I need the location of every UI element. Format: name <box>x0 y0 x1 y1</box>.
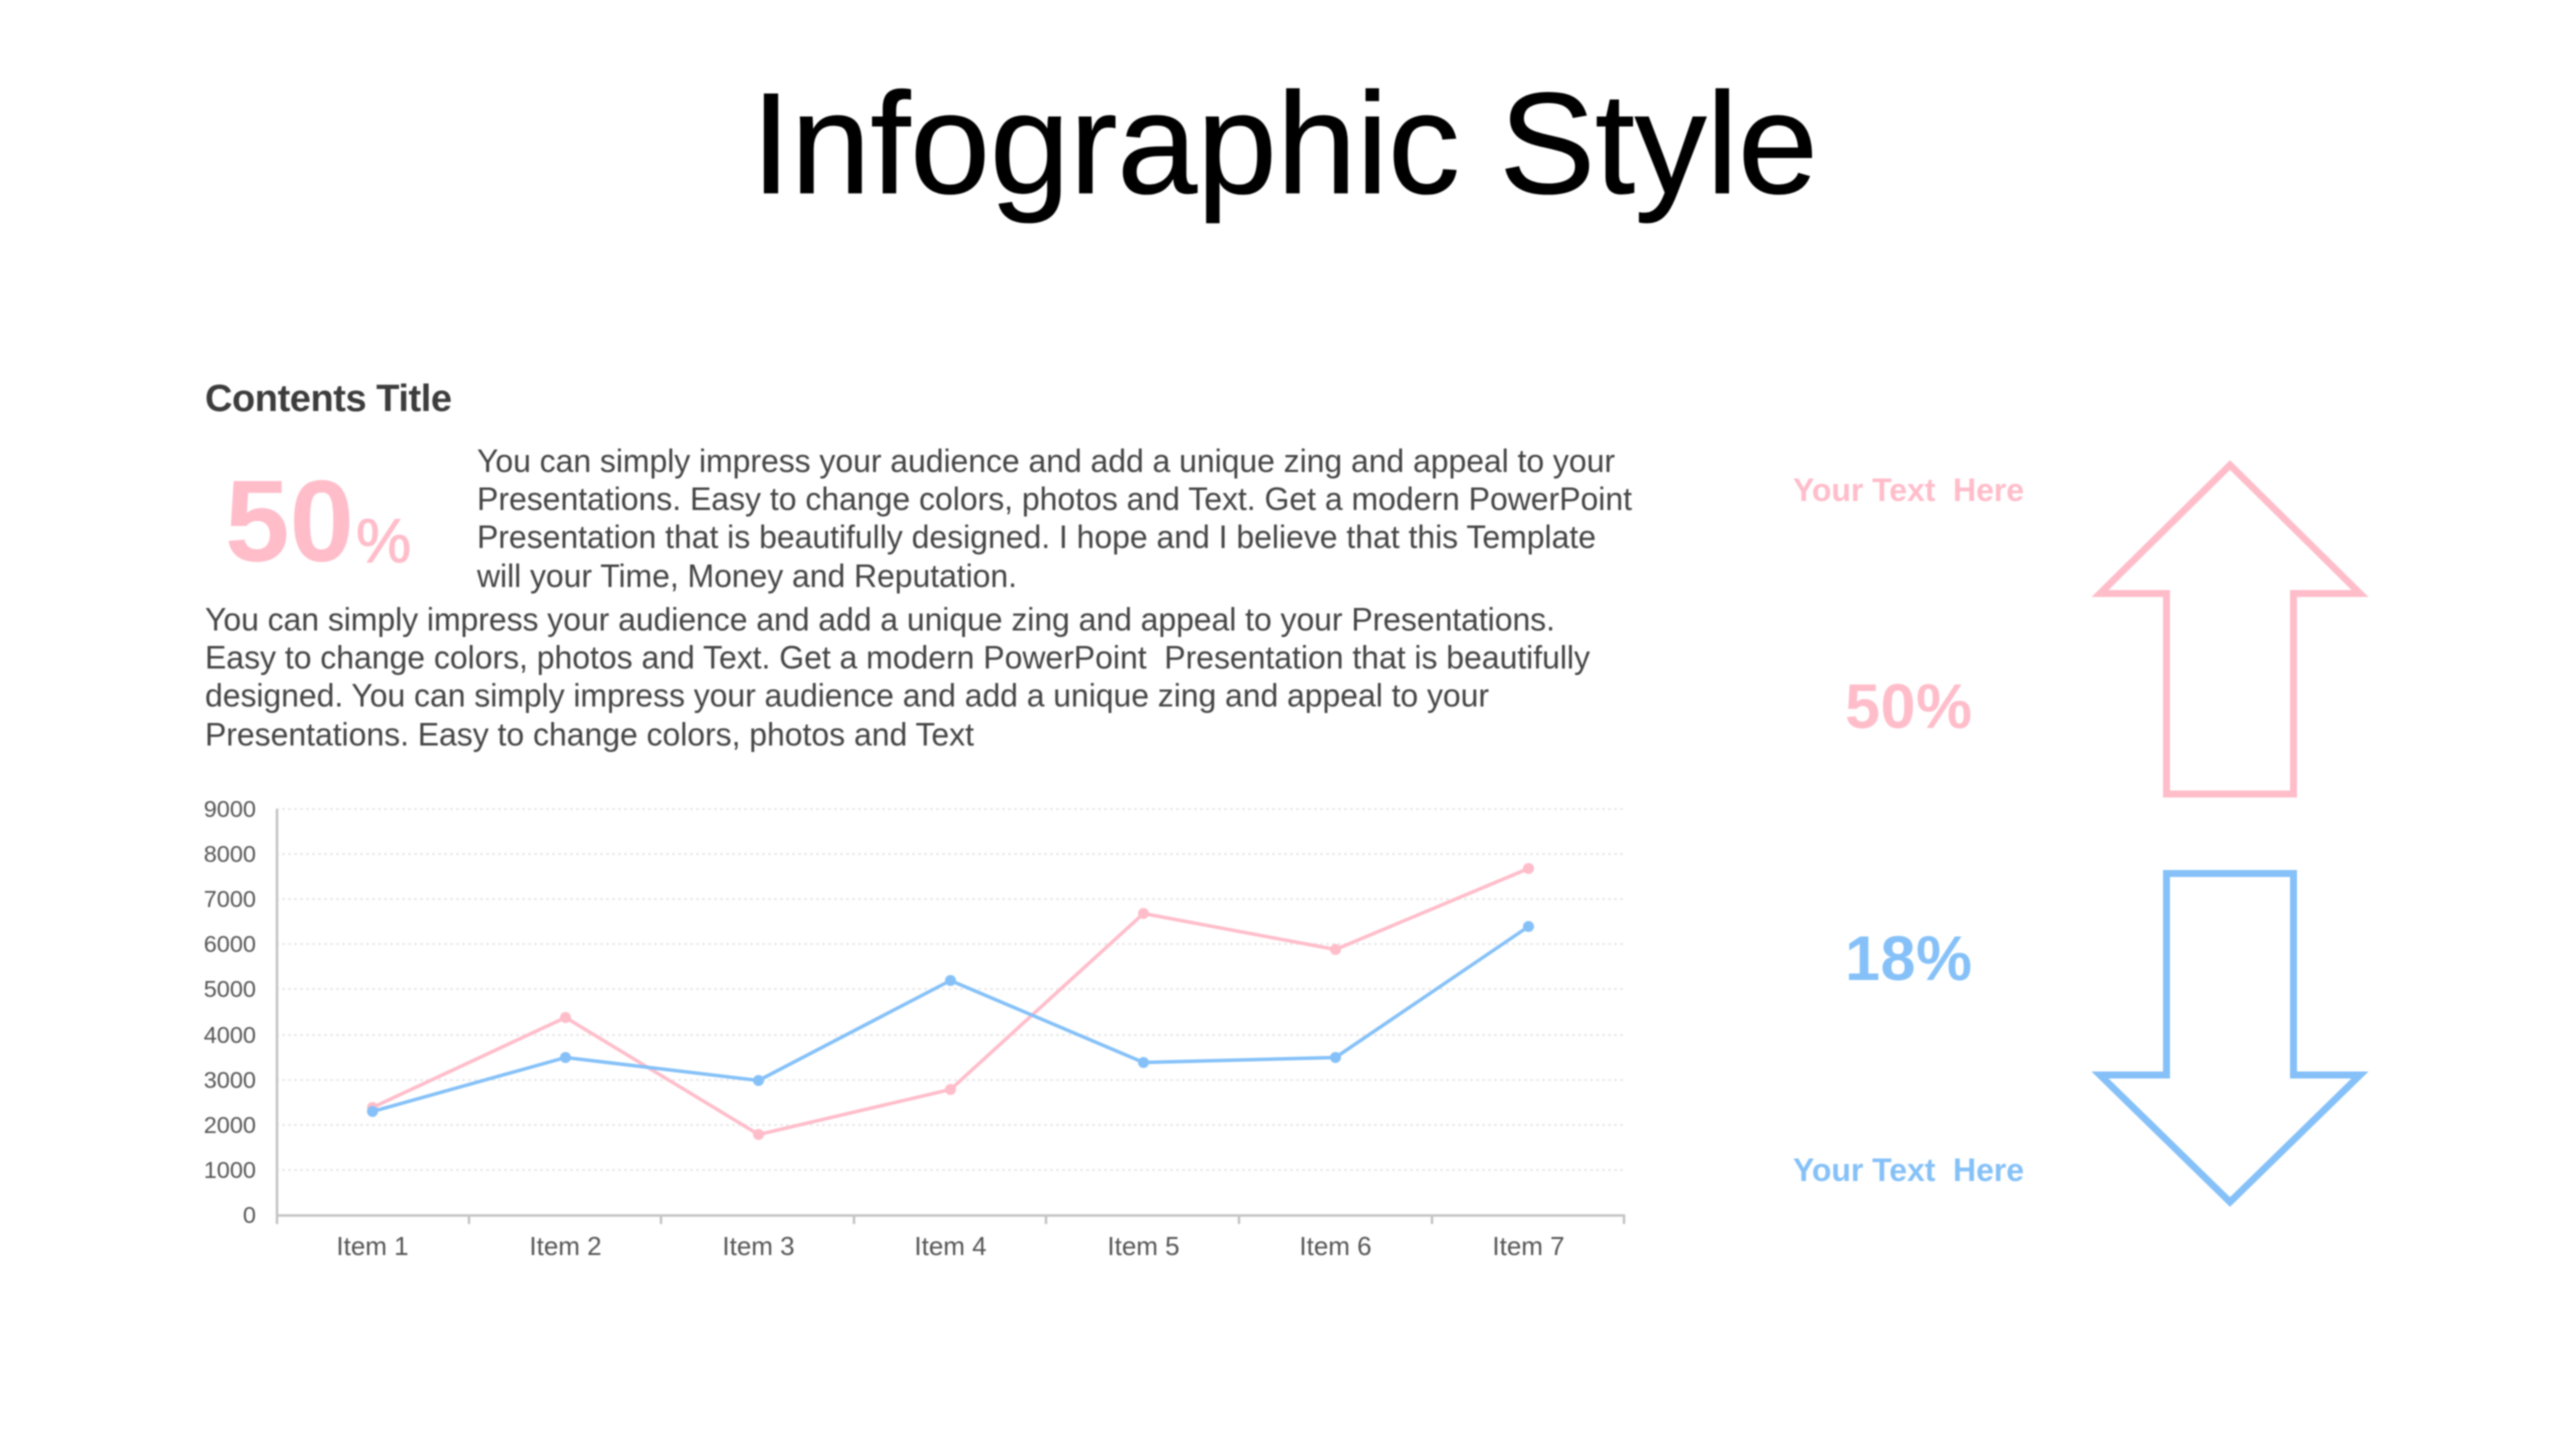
x-axis labels: Item 1 <box>336 1231 409 1261</box>
text block: second paragraph: Presentations. Easy to change colors, photos and Text <box>205 716 974 752</box>
label: your text here (pink): Your Text Here <box>1793 472 2024 508</box>
x-axis labels: Item 4 <box>914 1231 987 1261</box>
x-axis labels <box>336 1231 1565 1261</box>
y-axis labels: 9000 <box>204 796 256 822</box>
icon: down arrow <box>2100 874 2360 1202</box>
y-axis labels: 1000 <box>204 1157 256 1183</box>
text block: intro paragraph: will your Time, Money and Reputation. <box>476 558 1017 594</box>
text block: second paragraph: designed. You can simply impress your audience and add a unique zing and appeal to your <box>205 678 1489 714</box>
y-axis labels: 2000 <box>204 1112 256 1138</box>
stat: 50% (pink): 50% <box>1845 672 1972 742</box>
big stat: 50%: 50 <box>225 456 354 586</box>
x-axis labels: Item 6 <box>1299 1231 1372 1261</box>
label: your text here (blue): Your Text Here <box>1793 1152 2024 1188</box>
x-axis labels: Item 3 <box>722 1231 795 1261</box>
big stat: 50% <box>225 456 411 586</box>
pink series <box>367 863 1534 1140</box>
title: Infographic Style <box>751 63 1818 224</box>
y-axis labels: 6000 <box>204 931 256 957</box>
stat: 18% (blue): 18% <box>1845 924 1972 994</box>
x-axis labels: Item 7 <box>1492 1231 1565 1261</box>
y-axis labels: 8000 <box>204 841 256 867</box>
chart axes <box>276 809 1625 1224</box>
y-axis labels: 3000 <box>204 1067 256 1093</box>
text block: intro paragraph <box>476 443 1632 594</box>
big stat: 50%: % <box>356 507 411 576</box>
y-axis labels <box>204 796 256 1228</box>
x-axis labels: Item 2 <box>529 1231 602 1261</box>
heading: contents title: Contents Title <box>205 378 452 420</box>
text block: intro paragraph: Presentations. Easy to change colors, photos and Text. Get a modern PowerPoint <box>477 481 1632 517</box>
icon: up arrow <box>2100 465 2360 794</box>
text block: intro paragraph: You can simply impress your audience and add a unique zing and appeal to your <box>477 443 1615 479</box>
y-axis labels: 5000 <box>204 976 256 1002</box>
text block: intro paragraph: Presentation that is beautifully designed. I hope and I believe that this Template <box>477 519 1596 555</box>
text block: second paragraph: You can simply impress your audience and add a unique zing and appeal to your Presentations. <box>205 602 1555 638</box>
line chart <box>204 796 1625 1261</box>
text block: second paragraph <box>205 602 1590 752</box>
y-axis labels: 0 <box>243 1202 256 1228</box>
text block: second paragraph: Easy to change colors, photos and Text. Get a modern PowerPoint Presentation that is beautifully <box>205 640 1590 676</box>
blue series <box>367 921 1534 1117</box>
y-axis labels: 7000 <box>204 886 256 912</box>
x-axis labels: Item 5 <box>1107 1231 1180 1261</box>
y-axis labels: 4000 <box>204 1022 256 1048</box>
